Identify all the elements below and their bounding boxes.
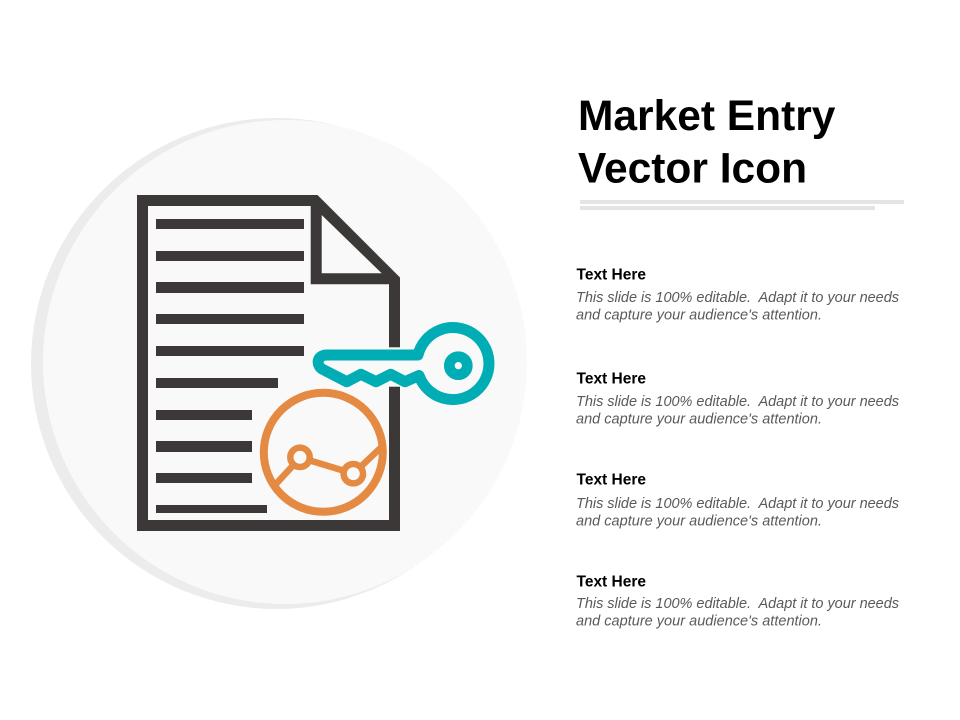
text block 4: This slide is 100% editable. Adapt it to your needs — [576, 596, 899, 612]
text block 4: and capture your audience's attention. — [576, 614, 822, 630]
text block 1 — [576, 266, 899, 324]
text block 2: This slide is 100% editable. Adapt it to your needs — [576, 394, 899, 410]
text block 3: This slide is 100% editable. Adapt it to your needs — [576, 496, 899, 512]
text block 2: Text Here — [576, 370, 646, 388]
title — [578, 93, 836, 192]
document text lines — [156, 219, 304, 513]
icon: key — [318, 328, 489, 400]
text block 1: and capture your audience's attention. — [576, 308, 822, 324]
text block 3: Text Here — [576, 472, 646, 488]
text block 1: This slide is 100% editable. Adapt it to your needs — [576, 290, 899, 306]
text block 4: Text Here — [576, 574, 646, 590]
document outline — [137, 195, 400, 531]
title underline — [580, 200, 904, 210]
text block 4 — [576, 574, 899, 630]
title: Vector Icon — [578, 146, 807, 192]
text block 3 — [576, 472, 899, 530]
text block 1: Text Here — [576, 266, 646, 284]
text block 2: and capture your audience's attention. — [576, 412, 822, 428]
text block 2 — [576, 370, 899, 428]
icon: chart circle — [264, 393, 383, 512]
background circle — [31, 118, 527, 609]
title: Market Entry — [578, 93, 836, 140]
text block 3: and capture your audience's attention. — [576, 514, 822, 530]
icon: document with key and chart — [137, 195, 489, 531]
